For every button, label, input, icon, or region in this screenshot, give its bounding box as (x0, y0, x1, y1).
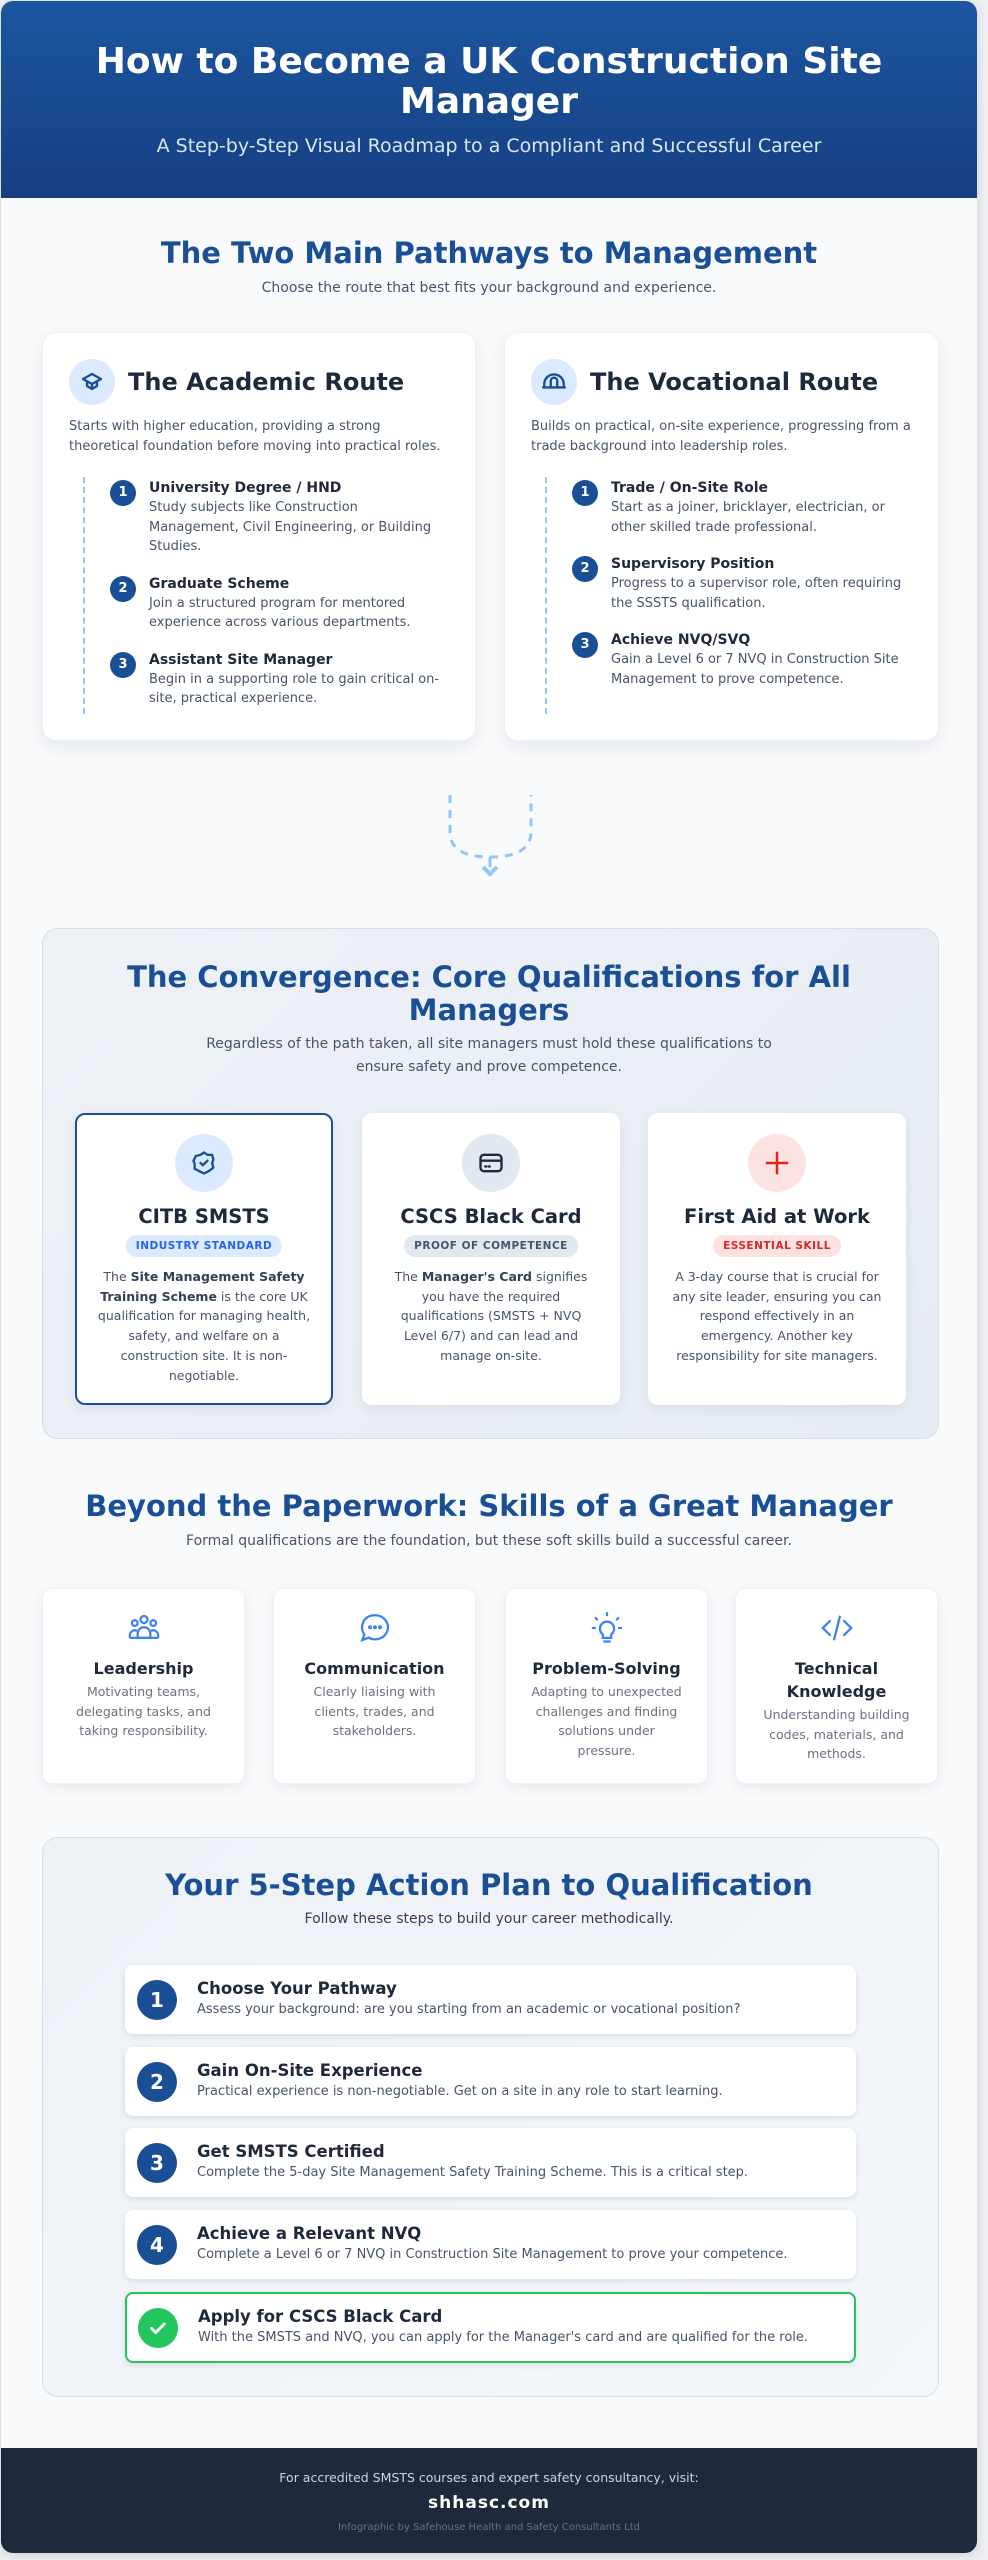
skill: leadership (42, 1588, 245, 1784)
subheading: convergence: Regardless of the path taken, all site managers must hold these qualifications to ensure safety and prove competence. (206, 1036, 772, 1075)
title: CITB SMSTS (138, 1205, 270, 1228)
panel: academic route (42, 332, 476, 741)
step row 4: 4 (150, 2232, 164, 2256)
step row 2: 2 (150, 2070, 164, 2094)
title: Understanding building codes, materials, and methods. (763, 1707, 910, 1761)
main title: How to Become a UK Construction Site (96, 41, 882, 82)
step 3: Achieve NVQ/SVQ (611, 632, 750, 648)
header subtitle: A Step-by-Step Visual Roadmap to a Compliant and Successful Career (157, 135, 821, 157)
badge: PROOF OF COMPETENCE (414, 1240, 568, 1252)
steps list (110, 480, 439, 706)
title: Technical (795, 1659, 878, 1678)
step 2: Graduate Scheme (149, 576, 289, 592)
title: Leadership (94, 1659, 193, 1678)
title (304, 1659, 445, 1738)
step 3: 3 (118, 656, 128, 672)
title (76, 1659, 211, 1738)
card: CITB SMSTS (75, 1113, 333, 1405)
icon: people (128, 1614, 160, 1639)
card description: Starts with higher education, providing a strong theoretical foundation before moving into practical roles. (69, 419, 441, 454)
step row 2: Gain On-Site Experience (197, 2061, 422, 2080)
description: The Site Management Safety Training Scheme is the core UK qualification for managing health, safety, and welfare on a construction site. It is non-negotiable. (98, 1269, 310, 1383)
icon: card (462, 1134, 520, 1192)
step 3: Assistant Site Manager (149, 652, 332, 668)
main title: Manager (400, 81, 578, 122)
footer link: shhasc.com (428, 2493, 550, 2513)
icon: lightbulb (592, 1612, 622, 1643)
icon: code brackets (821, 1616, 853, 1640)
subheading: skills: Formal qualifications are the foundation, but these soft skills build a successful career. (186, 1533, 792, 1549)
panel: vocational route (504, 332, 939, 741)
icon: hard hat (531, 359, 577, 405)
card title: The Academic Route (128, 368, 404, 396)
step 2: 2 (580, 561, 590, 576)
step 2 (110, 576, 411, 630)
footer credit: Infographic by Safehouse Health and Safety Consultants Ltd (338, 2522, 640, 2533)
description: The Manager's Card signifies you have the required qualifications (SMSTS + NVQ Level 6/7) and can lead and manage on-site. (395, 1269, 587, 1363)
step 1: 1 (118, 485, 128, 500)
step 3: Gain a Level 6 or 7 NVQ in Construction Site Management to prove competence. (611, 652, 899, 686)
title: First Aid at Work (684, 1205, 870, 1228)
title: Motivating teams, delegating tasks, and taking responsibility. (76, 1684, 211, 1738)
step row 1: Choose Your Pathway (197, 1979, 397, 1998)
step row 4 (125, 2210, 856, 2279)
step 1: 1 (580, 485, 590, 500)
step row 3 (125, 2128, 856, 2197)
step 1: Start as a joiner, bricklayer, electrician, or other skilled trade professional. (611, 500, 885, 534)
title (763, 1659, 910, 1761)
step row 4: Achieve a Relevant NVQ (197, 2224, 421, 2243)
badge: ESSENTIAL SKILL (723, 1240, 831, 1252)
title: CSCS Black Card (400, 1205, 582, 1228)
heading: pathways: The Two Main Pathways to Management (161, 236, 817, 270)
badge (126, 1235, 282, 1257)
card title: The Vocational Route (590, 368, 878, 396)
title: pressure. (578, 1743, 635, 1758)
icon: graduation cap (69, 359, 115, 405)
step 1 (572, 480, 885, 534)
title: Communication (304, 1659, 445, 1678)
step 3: 3 (580, 637, 590, 652)
heading: convergence: The Convergence: Core Qualifications for All Managers (127, 960, 851, 1027)
heading: action plan: Your 5-Step Action Plan to Qualification (165, 1868, 813, 1902)
step row 5: final: With the SMSTS and NVQ, you can apply for the Manager's card and are qualified for the role. (198, 2330, 808, 2345)
title: Problem-Solving (532, 1659, 681, 1678)
panel: convergence (42, 928, 939, 1439)
step 1: University Degree / HND (149, 480, 341, 496)
step 1: Trade / On-Site Role (611, 480, 768, 496)
step row 2: Practical experience is non-negotiable. Get on a site in any role to start learning. (197, 2084, 723, 2099)
step row 5: final: Apply for CSCS Black Card (198, 2307, 442, 2326)
main title (96, 41, 882, 122)
step row 1: Assess your background: are you starting from an academic or vocational position? (197, 2002, 740, 2017)
step 1 (110, 480, 431, 554)
step 2: Join a structured program for mentored experience across various departments. (149, 596, 411, 630)
footer text: For accredited SMSTS courses and expert safety consultancy, visit: (279, 2470, 699, 2485)
badge (404, 1235, 578, 1257)
subheading: action plan: Follow these steps to build your career methodically. (305, 1911, 673, 1927)
step 2: 2 (118, 580, 128, 596)
title (531, 1659, 682, 1758)
step row 4: Complete a Level 6 or 7 NVQ in Construction Site Management to prove your competence. (197, 2247, 788, 2262)
step 3: Begin in a supporting role to gain critical on-site, practical experience. (149, 672, 439, 706)
card description: Builds on practical, on-site experience, progressing from a trade background into leadership roles. (531, 419, 911, 454)
step 2 (572, 556, 901, 610)
step 2: Supervisory Position (611, 556, 774, 572)
badge: INDUSTRY STANDARD (136, 1240, 272, 1252)
icon: check (138, 2308, 178, 2348)
icon: shield check (175, 1134, 233, 1192)
step row 5: final (125, 2292, 856, 2363)
skill: technical knowledge (735, 1588, 938, 1784)
subheading: pathways: Choose the route that best fits your background and experience. (262, 280, 716, 296)
header banner (1, 1, 977, 198)
step 2: Progress to a supervisor role, often requiring the SSSTS qualification. (611, 576, 901, 610)
step row 3: Complete the 5-day Site Management Safety Training Scheme. This is a critical step. (197, 2165, 748, 2180)
icon: plus (748, 1134, 806, 1192)
title: Adapting to unexpected challenges and finding solutions under (531, 1684, 682, 1738)
step row 3: 3 (150, 2150, 164, 2174)
skill: communication (273, 1588, 476, 1784)
icon: chat bubble (360, 1614, 390, 1642)
skill: problem solving (505, 1588, 708, 1784)
heading: skills: Beyond the Paperwork: Skills of a Great Manager (85, 1489, 893, 1523)
footer (1, 2448, 977, 2553)
panel: action plan (42, 1837, 939, 2397)
step row 1 (125, 1965, 856, 2034)
step row 2 (125, 2047, 856, 2116)
step 1: Study subjects like Construction Management, Civil Engineering, or Building Studies. (149, 500, 431, 554)
card: CSCS Black Card (362, 1113, 620, 1405)
description: A 3-day course that is crucial for any site leader, ensuring you can respond effectively in an emergency. Another key responsibility for site managers. (673, 1269, 881, 1363)
arrow: converging paths (448, 795, 532, 877)
title: Clearly liaising with clients, trades, and stakeholders. (314, 1684, 435, 1738)
step row 1: 1 (150, 1988, 164, 2012)
step 3 (110, 652, 439, 706)
badge (713, 1235, 841, 1257)
card: First Aid (648, 1113, 906, 1405)
step 3 (572, 632, 899, 686)
steps list (572, 480, 901, 686)
title: Knowledge (787, 1682, 886, 1701)
step row 3: Get SMSTS Certified (197, 2142, 385, 2161)
